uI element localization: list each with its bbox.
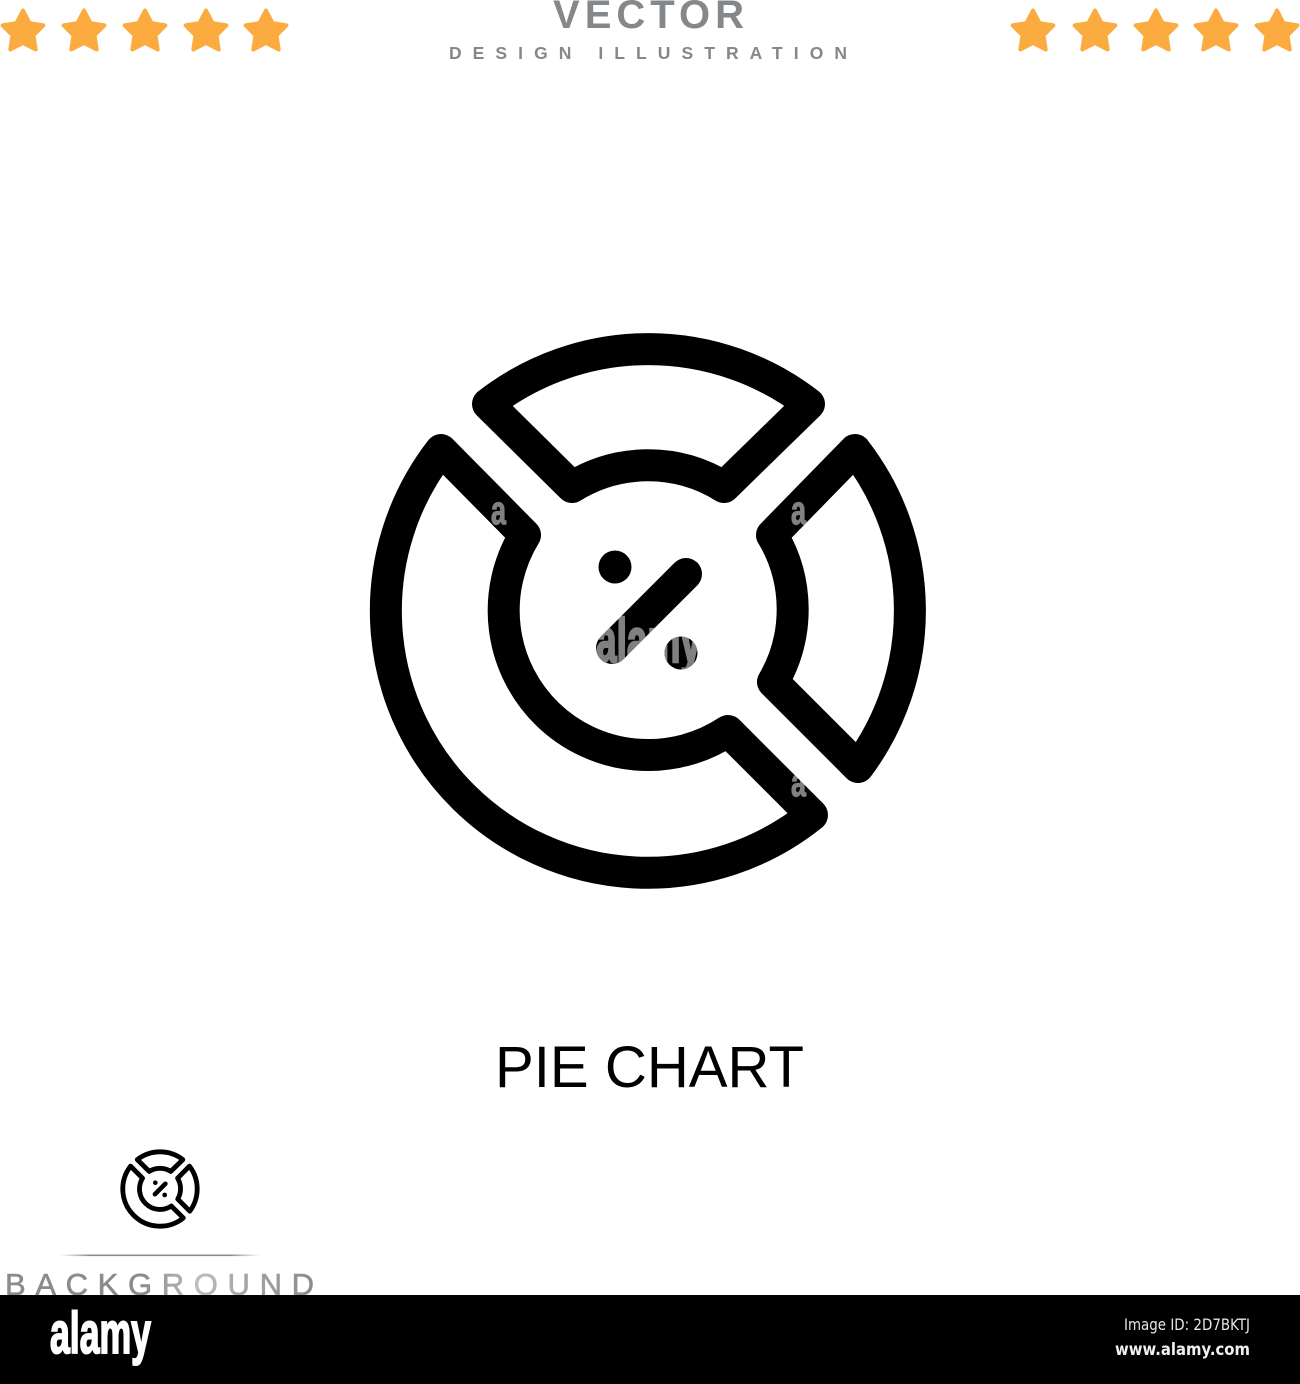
rating stars: right [1013, 10, 1297, 50]
watermark: letter bottom: a [791, 761, 807, 805]
footer: website: www.alamy.com [1115, 1340, 1250, 1360]
subheading: design illustration: DESIGN ILLUSTRATION [449, 43, 847, 63]
footer: image id: Image ID: 2D7BKTJ [1124, 1315, 1250, 1334]
divider line above background label [60, 1254, 260, 1256]
watermark: letter right: a [791, 489, 807, 533]
percent: upper dot [598, 550, 632, 584]
icon: large pie chart with percent sign [386, 349, 910, 873]
percent: lower dot [664, 636, 698, 670]
icon: small pie chart [123, 1152, 197, 1226]
watermark: alamy over percent sign: alamy [596, 607, 701, 676]
logo: alamy: alamy [50, 1301, 151, 1366]
segment: left and bottom [386, 450, 812, 873]
watermark: letter left: a [491, 489, 507, 533]
segment: right [772, 450, 910, 767]
segment: top [488, 349, 809, 487]
title: pie chart: PIE CHART [495, 1035, 804, 1100]
label: background: BACKGROUND [5, 1267, 314, 1302]
footer bar [0, 1295, 1300, 1384]
rating stars: left [3, 10, 286, 50]
percent: slash [612, 574, 686, 648]
